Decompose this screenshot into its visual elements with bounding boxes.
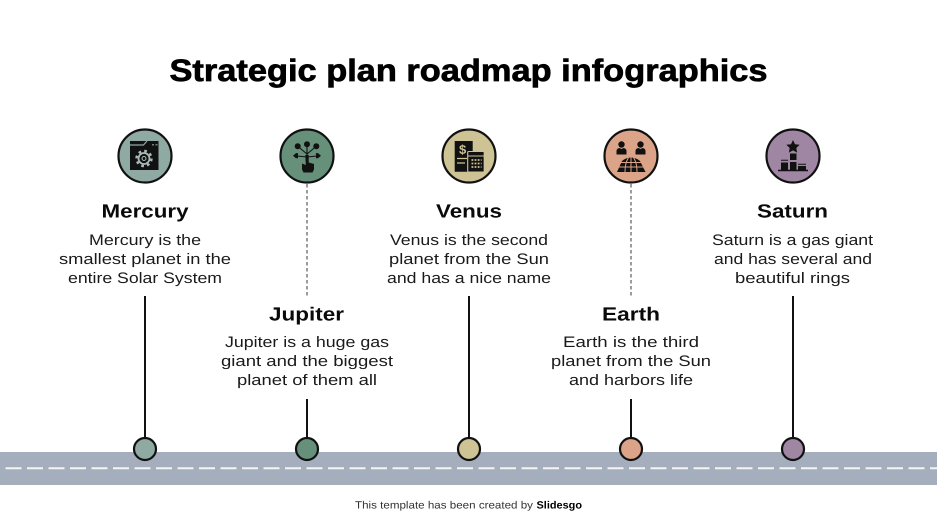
connector: Jupiter dashed [306, 184, 308, 296]
text: Earth description [551, 334, 711, 389]
text: Venus description [387, 232, 551, 287]
text: Earth description: and harbors life [569, 372, 693, 389]
text: Mercury description: Mercury is the [89, 232, 201, 249]
text: Venus description: Venus is the second [390, 232, 548, 249]
footer credit: Slidesgo [536, 500, 582, 512]
marker: Saturn [782, 438, 804, 460]
connector: Saturn [792, 296, 794, 438]
text: Saturn description: beautiful rings [735, 270, 850, 287]
connector: Venus [468, 296, 470, 438]
icon: Saturn star podium [766, 130, 820, 182]
text: Mercury description: entire Solar System [68, 270, 222, 287]
marker: Mercury [134, 438, 156, 460]
panel: Venus [387, 130, 551, 460]
icon: Jupiter network touch [280, 130, 334, 182]
text: Jupiter description: planet of them all [237, 372, 377, 389]
panel: Saturn [712, 130, 874, 460]
connector: Earth dashed [630, 184, 632, 296]
title: Strategic plan roadmap infographics [170, 53, 768, 88]
road [0, 452, 937, 485]
panel: Jupiter [221, 130, 394, 460]
icon: Earth people and globe [604, 130, 658, 182]
icon: Venus invoice and calculator [442, 130, 496, 182]
text: Jupiter description: giant and the biggest [221, 353, 394, 370]
text: Venus description: planet from the Sun [389, 251, 549, 268]
text: Mercury description [59, 232, 231, 287]
text: Earth description: planet from the Sun [551, 353, 711, 370]
marker: Venus [458, 438, 480, 460]
text: Jupiter description [221, 334, 394, 389]
footer credit: This template has been created by [355, 500, 534, 512]
text: Saturn description [712, 232, 874, 287]
icon: Mercury browser with gear [118, 130, 172, 182]
panel: Mercury [59, 130, 231, 460]
panel: Earth [551, 130, 711, 460]
marker: Earth [620, 438, 642, 460]
heading: Saturn: Saturn [757, 202, 828, 223]
text: Venus description: and has a nice name [387, 270, 551, 287]
text: Jupiter description: Jupiter is a huge gas [225, 334, 389, 351]
connector: Mercury [144, 296, 146, 438]
icon: Venus invoice and calculator: $ [459, 142, 467, 157]
heading: Earth: Earth [602, 305, 660, 326]
marker: Jupiter [296, 438, 318, 460]
text: Earth description: Earth is the third [563, 334, 699, 351]
text: Mercury description: smallest planet in the [59, 251, 231, 268]
heading: Mercury: Mercury [102, 202, 189, 223]
connector: Earth [630, 399, 632, 438]
text: Saturn description: and has several and [714, 251, 872, 268]
connector: Jupiter [306, 399, 308, 438]
heading: Venus: Venus [436, 202, 502, 223]
text: Saturn description: Saturn is a gas giant [712, 232, 874, 249]
heading: Jupiter: Jupiter [269, 305, 345, 326]
